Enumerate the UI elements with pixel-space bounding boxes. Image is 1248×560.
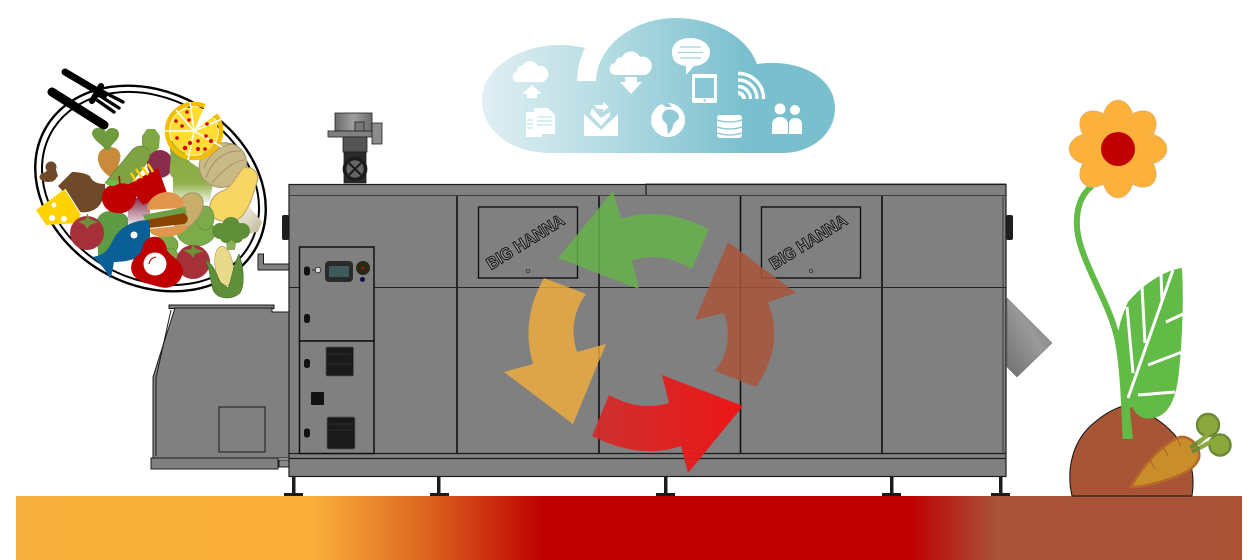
icon: zucchini — [105, 146, 150, 187]
icon: cloud upload — [512, 61, 548, 98]
cycle arrows — [504, 191, 796, 473]
icon: onion — [193, 136, 253, 194]
top blower unit — [328, 113, 382, 183]
icon: celery — [142, 129, 160, 155]
leaf — [1118, 268, 1183, 419]
icon: tablet — [692, 74, 717, 103]
arrow: orange — [504, 278, 606, 424]
feeder hopper — [151, 288, 293, 469]
icon: corn — [205, 245, 243, 298]
icon: pizza — [165, 101, 222, 160]
icon: fish — [92, 220, 150, 279]
icon: cabbage — [154, 206, 215, 272]
cloud shape — [482, 18, 835, 153]
carrot in soil — [1131, 414, 1230, 487]
icon: globe — [651, 103, 685, 137]
icon: speech bubble — [672, 38, 710, 75]
discharge chute — [1007, 298, 1052, 377]
machine: Big Hanna composter — [151, 113, 1052, 496]
arrow: green — [558, 191, 709, 289]
icon: beet lower — [128, 198, 150, 224]
machine legs — [284, 477, 1010, 496]
icon: envelope — [584, 102, 618, 136]
icon: fennel — [168, 140, 214, 206]
icon: chicken — [40, 162, 105, 212]
main body — [289, 184, 1006, 476]
arrow: red — [592, 375, 743, 473]
nameplate left: BIG HANNA — [483, 211, 568, 274]
icon: asparagus — [97, 211, 128, 256]
flower — [1069, 100, 1167, 198]
icon: carrot — [92, 128, 120, 178]
icon: tomato left — [70, 213, 104, 250]
icon: apple — [102, 176, 136, 213]
icon: fork — [65, 72, 123, 112]
stem — [1077, 186, 1130, 436]
soil mound — [1070, 405, 1193, 496]
icon: cheese — [36, 189, 81, 225]
icon: knife — [52, 92, 104, 125]
icon: fries — [127, 164, 167, 205]
fish eye — [130, 232, 138, 238]
nameplate right: BIG HANNA — [766, 211, 851, 274]
control panel upper — [300, 247, 374, 341]
icon: squash — [210, 168, 258, 222]
ground gradient band — [16, 496, 1242, 560]
icon: beet — [147, 150, 173, 178]
mound and plant — [1069, 100, 1230, 496]
icon: people — [772, 104, 802, 134]
arrow: brown — [695, 242, 796, 387]
icon: documents — [526, 108, 555, 137]
icon: tomato right — [176, 244, 210, 279]
icon: database stack — [717, 115, 742, 138]
plate rings — [0, 45, 303, 332]
side knobs — [282, 215, 1013, 240]
plate of food — [0, 45, 303, 332]
control panel lower — [300, 341, 374, 454]
icon: radish — [230, 205, 262, 235]
icon: burger — [143, 192, 188, 237]
icon: rss signal — [738, 73, 764, 99]
icon: cloud download — [609, 51, 652, 94]
icon: potato — [174, 193, 203, 230]
icon: broccoli — [212, 217, 250, 250]
outlet pipe — [258, 254, 289, 270]
cloud with service icons — [482, 18, 835, 153]
icon: red pepper with egg — [131, 237, 183, 288]
